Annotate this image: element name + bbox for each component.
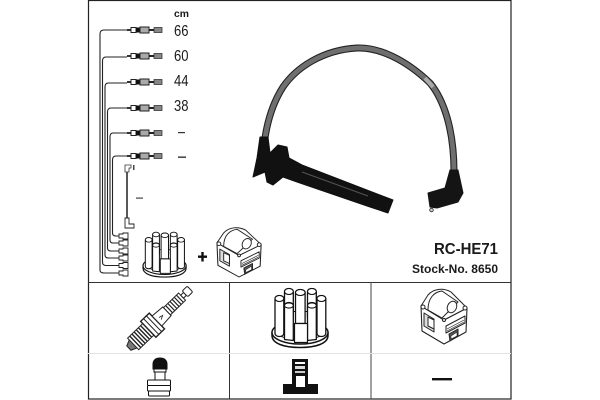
icon: distributor terminal: [283, 359, 318, 394]
stock number: Stock-No. 8650: [412, 262, 498, 276]
cable length values: 60: [174, 48, 189, 65]
icon: small distributor cap: [143, 232, 186, 277]
part number: RC-HE71: [434, 241, 498, 258]
cable length values: 44: [174, 73, 189, 90]
outer frame and grid: [88, 0, 511, 399]
icon: spark plug terminal: [148, 358, 170, 396]
cable length values: 66: [174, 23, 188, 40]
icon: small ignition coil: [217, 228, 261, 277]
cable length values: 38: [174, 98, 188, 115]
cable length unit heading: cm: [174, 8, 189, 20]
icon: large distributor cap: [272, 288, 328, 348]
cable length values: [136, 23, 189, 199]
not available dash: [432, 378, 452, 380]
icon: spark plug: [121, 281, 198, 356]
ignition cable photo: [253, 48, 463, 213]
schematic wiring harness: [100, 30, 127, 273]
schematic short coil lead: [125, 165, 134, 228]
plus sign: [198, 252, 207, 262]
icon: large ignition coil: [421, 289, 467, 344]
schematic cable connectors: [119, 27, 162, 276]
